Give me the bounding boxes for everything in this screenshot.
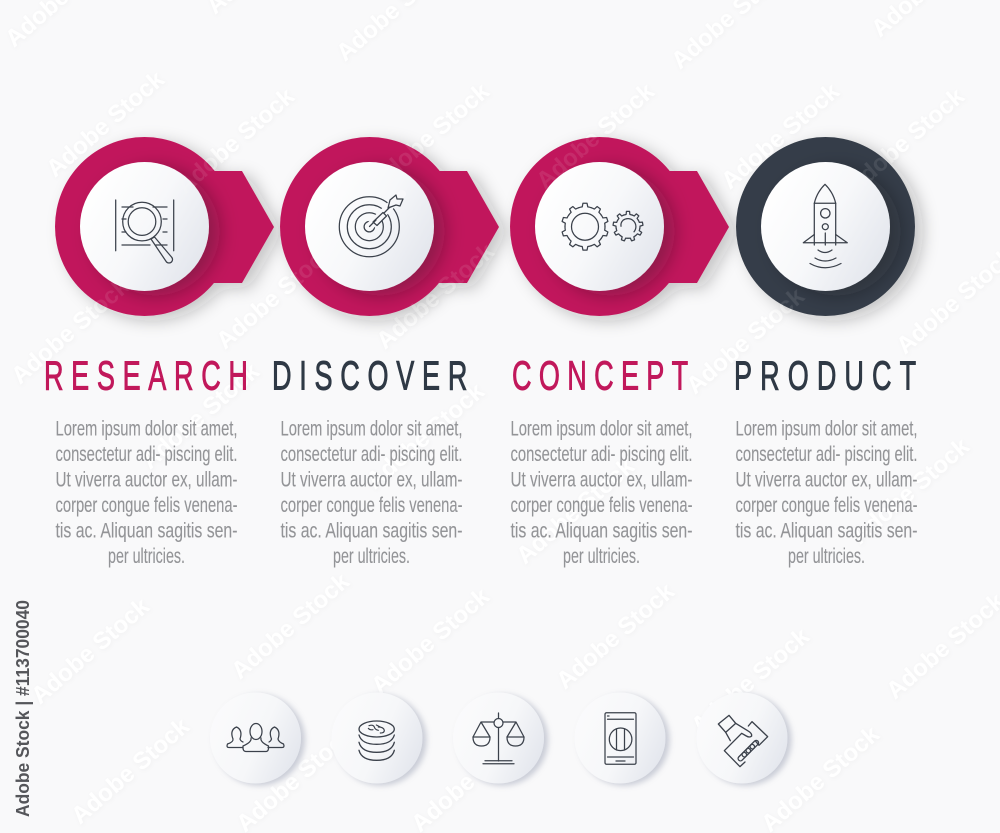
watermark pattern: Adobe Stock [371, 237, 500, 355]
icon: rocket [803, 184, 847, 268]
text block: product: per ultricies. [788, 545, 865, 568]
step 1: research badge [55, 137, 274, 316]
watermark pattern: Adobe Stock [211, 237, 340, 355]
heading: research: RESEARCH [44, 354, 248, 399]
icon: target with dart [339, 194, 403, 257]
watermark overlay on badges: Adobe Stock [41, 65, 170, 183]
text block: product: Ut viverra auctor ex, ullam- [736, 469, 918, 492]
step 2: discover badge [280, 137, 499, 316]
step 4: product badge [736, 137, 915, 316]
heading: discover: DISCOVER [272, 354, 467, 399]
text block: research: tis ac. Aliquan sagitis sen- [56, 520, 238, 543]
watermark pattern: Adobe Stock [681, 282, 810, 400]
text block: discover: consectetur adi- piscing elit. [280, 443, 462, 466]
small icon: scales [453, 692, 544, 784]
watermark pattern: Adobe Stock [366, 582, 495, 700]
watermark pattern: Adobe Stock [226, 567, 355, 685]
text block: discover: tis ac. Aliquan sagitis sen- [280, 520, 463, 543]
watermark pattern: Adobe Stock [841, 82, 970, 200]
text block: research: consectetur adi- piscing elit. [56, 443, 238, 466]
text block: concept: corper congue felis venena- [510, 494, 692, 517]
watermark pattern: Adobe Stock [511, 452, 640, 570]
watermark overlay on badges: Adobe Stock [6, 272, 135, 390]
watermark overlay on badges [6, 65, 970, 400]
icon: magnifying glass over document [116, 200, 174, 263]
text block: concept: per ultricies. [563, 545, 640, 568]
step 3: concept badge [510, 137, 729, 316]
watermark overlay on badges: Adobe Stock [841, 82, 970, 200]
watermark pattern: Adobe Stock [846, 432, 975, 550]
text block: product: corper congue felis venena- [736, 494, 918, 517]
text block: research: per ultricies. [108, 545, 185, 568]
watermark overlay on badges: Adobe Stock [371, 237, 500, 355]
watermark pattern: Adobe Stock [41, 65, 170, 183]
watermark pattern: Adobe Stock [136, 357, 265, 475]
text block: research: Ut viverra auctor ex, ullam- [56, 469, 238, 492]
watermark overlay on badges: Adobe Stock [531, 77, 660, 195]
heading: product: PRODUCT [734, 354, 916, 399]
text block: discover: Lorem ipsum dolor sit amet, [280, 418, 462, 441]
credit: adobe stock id: Adobe Stock | #113700040 [13, 600, 33, 817]
text block: discover [280, 418, 463, 568]
watermark pattern: Adobe Stock [6, 272, 135, 390]
watermark pattern: Adobe Stock [66, 712, 195, 830]
text block: research: Lorem ipsum dolor sit amet, [56, 418, 237, 441]
text block: concept: tis ac. Aliquan sagitis sen- [510, 520, 693, 543]
text block: product [736, 418, 918, 568]
text block: product: Lorem ipsum dolor sit amet, [736, 418, 918, 441]
watermark pattern: Adobe Stock [551, 577, 680, 695]
small icon: smartphone [574, 692, 666, 784]
watermark overlay on badges: Adobe Stock [366, 77, 495, 195]
small icon: handshake [696, 692, 788, 784]
watermark pattern: Adobe Stock [26, 592, 155, 710]
text block: product: tis ac. Aliquan sagitis sen- [736, 520, 918, 543]
watermark overlay on badges: Adobe Stock [211, 237, 340, 355]
watermark pattern: Adobe Stock [716, 77, 845, 195]
watermark pattern: Adobe Stock [361, 377, 490, 495]
text block: discover: per ultricies. [333, 545, 410, 568]
icon: gears [561, 203, 643, 250]
text block: concept [510, 418, 693, 568]
text block: product: consectetur adi- piscing elit. [736, 443, 918, 466]
small icon: team [210, 692, 301, 784]
heading: concept: CONCEPT [512, 354, 688, 399]
watermark overlay on badges: Adobe Stock [716, 77, 845, 195]
watermark pattern: Adobe Stock [366, 77, 495, 195]
watermark pattern: Adobe Stock [531, 77, 660, 195]
watermark overlay on badges: Adobe Stock [171, 82, 300, 200]
text block: concept: Ut viverra auctor ex, ullam- [510, 469, 693, 492]
watermark overlay on badges: Adobe Stock [681, 282, 810, 400]
text block: concept: consectetur adi- piscing elit. [510, 443, 692, 466]
small icon: coins [332, 692, 422, 784]
text block: research [56, 418, 238, 568]
watermark pattern: Adobe Stock [686, 622, 815, 740]
text block: discover: Ut viverra auctor ex, ullam- [280, 469, 463, 492]
text block: discover: corper congue felis venena- [280, 494, 462, 517]
text block: research: corper congue felis venena- [56, 494, 238, 517]
watermark pattern: Adobe Stock [171, 82, 300, 200]
text block: concept: Lorem ipsum dolor sit amet, [510, 418, 692, 441]
